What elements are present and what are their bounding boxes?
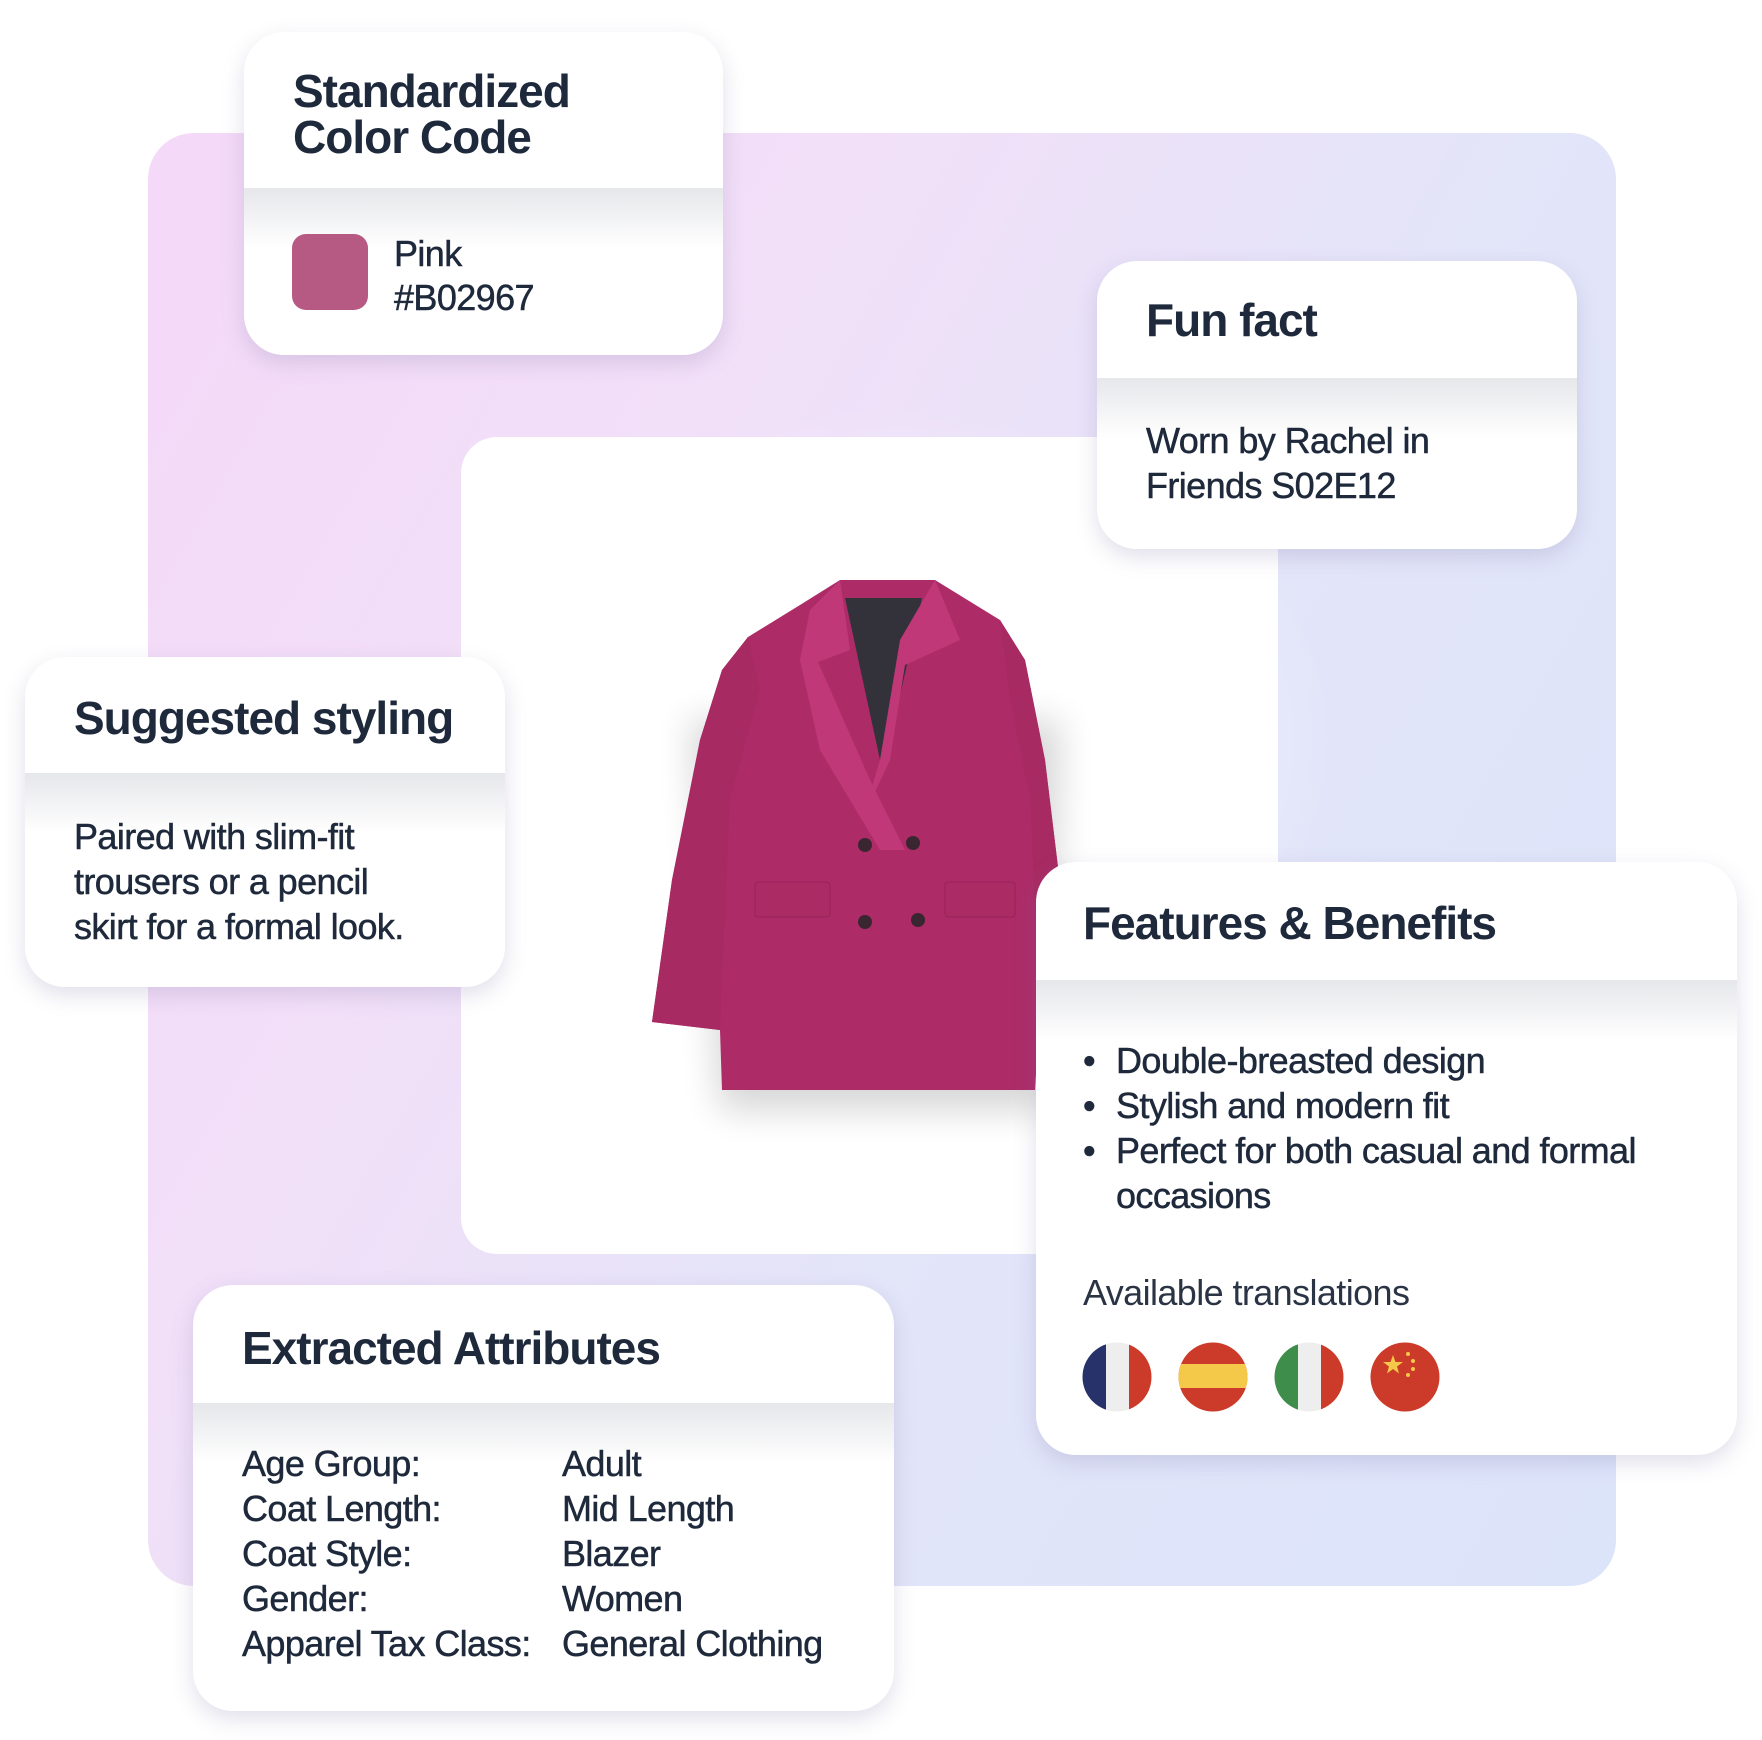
attribute labels: Age Group: [242, 1443, 420, 1484]
card: features & benefits [1036, 862, 1737, 1455]
card: standardized color code [244, 32, 723, 355]
attribute labels: Apparel Tax Class: [242, 1623, 531, 1664]
feature bullet list: • [1083, 1040, 1095, 1081]
feature bullet list: • [1083, 1130, 1095, 1171]
attribute values: Adult [562, 1443, 641, 1484]
attribute values [562, 1443, 823, 1664]
feature bullet list [1083, 1040, 1636, 1216]
attribute labels: Coat Length: [242, 1488, 441, 1529]
attribute values: General Clothing [562, 1623, 823, 1664]
card: extracted attributes [193, 1285, 894, 1711]
color name and hex [394, 233, 534, 318]
available translations label: Available translations [1083, 1272, 1409, 1313]
feature bullet list: Perfect for both casual and formal occasions [1116, 1130, 1636, 1216]
heading: Suggested styling: Suggested styling [74, 692, 453, 744]
heading: Standardized Color Code [293, 65, 570, 163]
feature bullet list: Stylish and modern fit [1116, 1085, 1449, 1126]
card: suggested styling [25, 657, 505, 987]
feature bullet list: • [1083, 1085, 1095, 1126]
card: fun fact [1097, 261, 1577, 549]
flags [1082, 1342, 1440, 1412]
attribute labels [242, 1443, 531, 1664]
attribute values: Blazer [562, 1533, 660, 1574]
styling text: skirt for a formal look. [74, 906, 404, 947]
flag: Spain [1178, 1342, 1250, 1412]
background panel [148, 133, 1616, 1586]
fun fact text: Worn by Rachel in [1146, 420, 1429, 461]
flag: France [1082, 1342, 1153, 1412]
product photo panel [461, 437, 1278, 1254]
feature bullet list: Double-breasted design [1116, 1040, 1485, 1081]
fun fact text: Friends S02E12 [1146, 465, 1396, 506]
fun fact text [1146, 420, 1429, 506]
styling text [74, 816, 404, 947]
attribute values: Women [562, 1578, 682, 1619]
heading: Standardized Color Code: Color Code [293, 111, 531, 163]
attribute labels: Gender: [242, 1578, 368, 1619]
styling text: trousers or a pencil [74, 861, 368, 902]
heading: Features & Benefits: Features & Benefits [1083, 897, 1496, 949]
color name and hex: Pink [394, 233, 462, 274]
flag: China [1370, 1342, 1440, 1412]
styling text: Paired with slim-fit [74, 816, 354, 857]
heading: Extracted Attributes: Extracted Attributes [242, 1322, 660, 1374]
color swatch [292, 234, 368, 310]
heading: Standardized Color Code: Standardized [293, 65, 570, 117]
color name and hex: #B02967 [394, 277, 534, 318]
attribute values: Mid Length [562, 1488, 734, 1529]
attribute labels: Coat Style: [242, 1533, 411, 1574]
heading: Fun fact: Fun fact [1146, 294, 1317, 346]
flag: Italy [1274, 1342, 1345, 1412]
